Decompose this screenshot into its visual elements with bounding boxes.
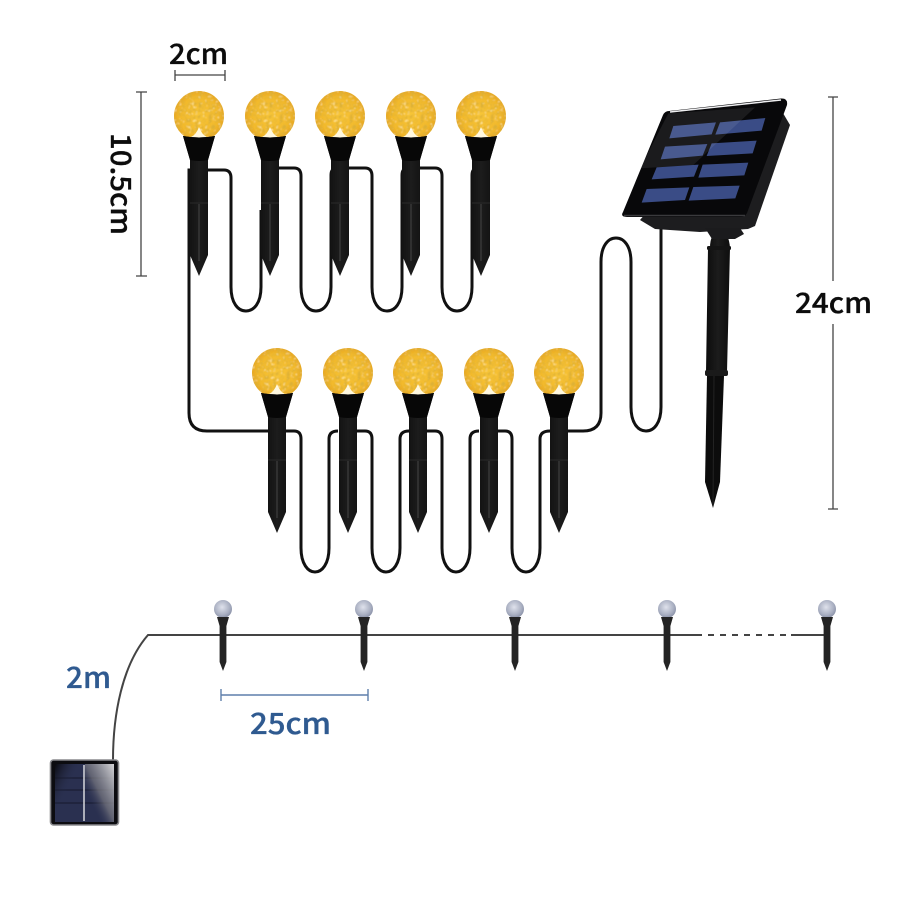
- panel bottom fittings: [705, 228, 744, 239]
- panel top highlight: [670, 100, 781, 112]
- dimension: 10.5cm: 10.5cm: [102, 133, 142, 235]
- top row of lit bubble lights: [174, 91, 506, 276]
- solar panel: [622, 98, 790, 239]
- dimension: 24cm: [795, 97, 872, 509]
- solar panel stake: [705, 232, 731, 508]
- solar cells: [640, 107, 765, 203]
- bottom row of lit bubble lights: [252, 348, 584, 533]
- lower diagram: small solar panel: [50, 760, 118, 825]
- dimension: 10.5cm: [102, 92, 147, 276]
- dimension: 24cm: 24cm: [795, 282, 872, 322]
- lower diagram: cable: [113, 635, 827, 760]
- dimension: 2cm: 2cm: [169, 33, 228, 73]
- lower diagram: small lights: [214, 600, 836, 671]
- panel front frame: [622, 98, 787, 217]
- dimension: 25cm spacing: [221, 689, 368, 743]
- panel rear housing: [640, 108, 790, 232]
- dimension: 25cm spacing: 25cm: [250, 701, 331, 743]
- panel front lower edge: [624, 214, 745, 216]
- wires of the top and bottom light rows: [189, 168, 661, 572]
- label: 2m cable length: 2m: [66, 655, 111, 697]
